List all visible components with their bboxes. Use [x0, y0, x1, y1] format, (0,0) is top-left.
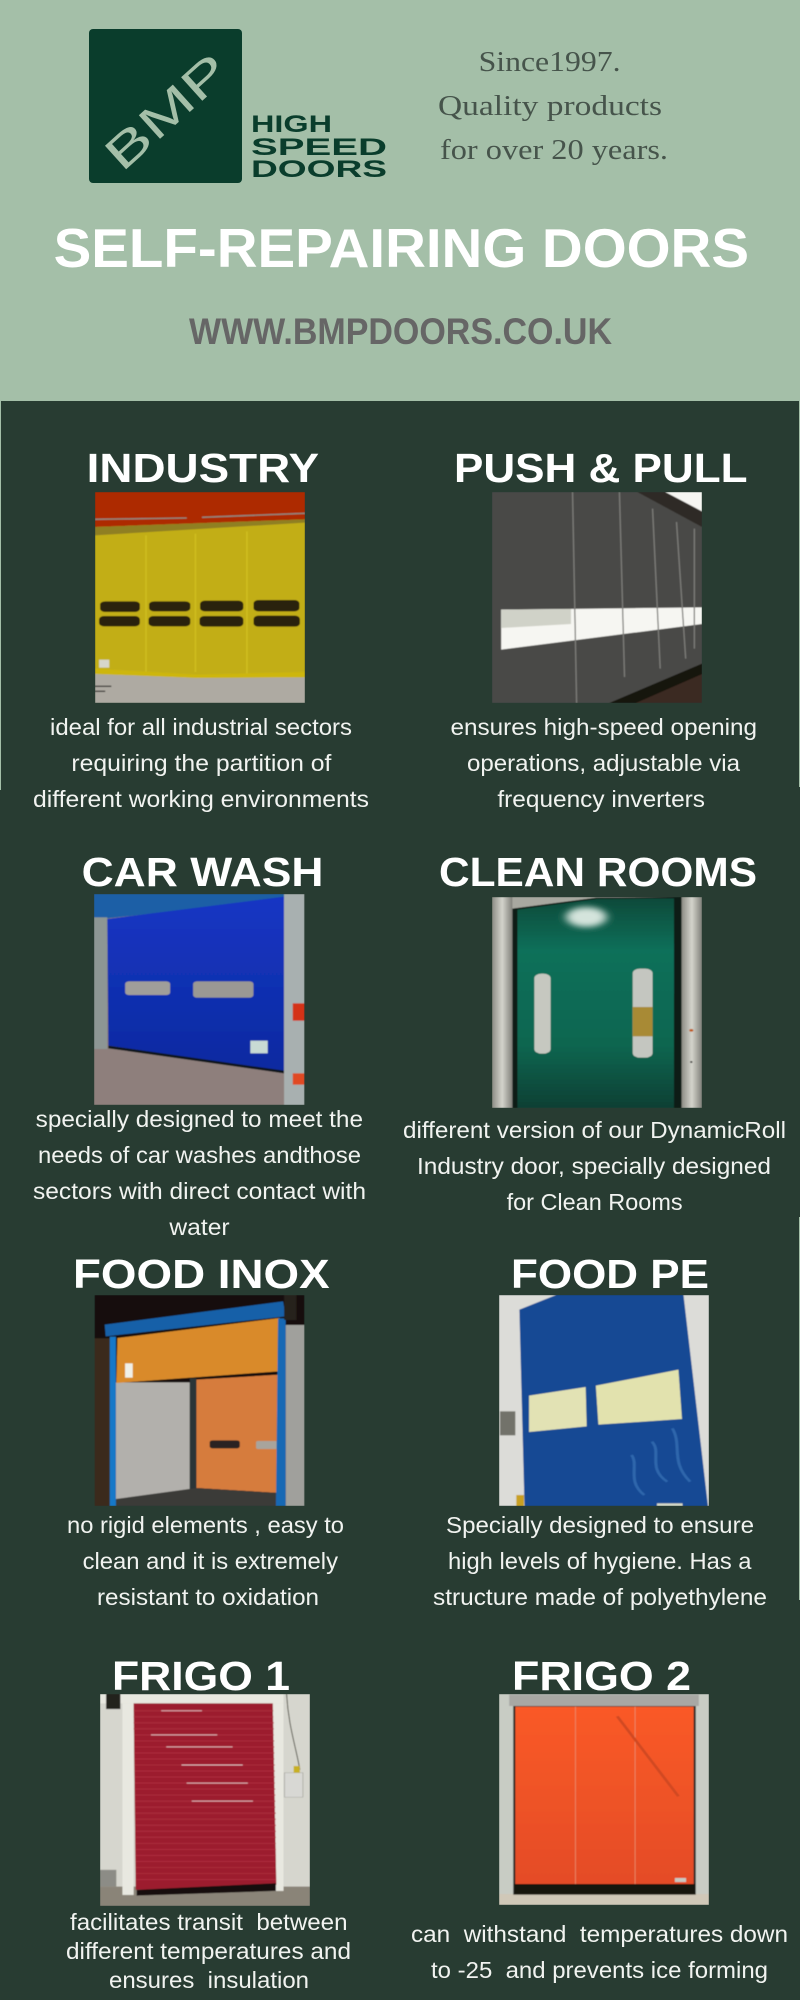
- website url: WWW.BMPDOORS.CO.UK: [189, 311, 612, 352]
- header band: [0, 0, 800, 401]
- panel: frigo 2: [411, 1653, 788, 1983]
- text: frigo 2: [411, 1921, 788, 1983]
- text: push and pull: frequency inverters: [497, 786, 705, 812]
- logo wordmark: DOORS: [251, 156, 387, 183]
- panel: food inox: [67, 1251, 344, 1610]
- panel: push and pull: [450, 445, 757, 812]
- text: frigo 1: facilitates transit between: [70, 1909, 347, 1935]
- photo: orange frigo door: [499, 1694, 709, 1905]
- photo: orange food inox door: [94, 1295, 304, 1506]
- logo wordmark: [251, 111, 387, 183]
- text: car wash: water: [168, 1214, 230, 1240]
- tagline: Since1997.: [479, 46, 621, 78]
- text: clean rooms: different version of our DynamicRoll: [403, 1117, 786, 1143]
- text: food pe: [433, 1512, 767, 1610]
- logo square: [89, 29, 242, 183]
- tagline: for over 20 years.: [440, 134, 668, 166]
- text: frigo 2: can withstand temperatures down: [411, 1921, 788, 1947]
- text: frigo 1: [66, 1909, 351, 1993]
- logo square: BMP: [94, 43, 239, 180]
- panel: food pe: [433, 1251, 767, 1610]
- photo: grey push and pull door: [492, 492, 702, 703]
- text: industry: different working environments: [33, 786, 369, 812]
- panel: frigo 1: [66, 1653, 351, 1993]
- text: food inox: resistant to oxidation: [97, 1584, 319, 1610]
- text: frigo 1: ensures insulation: [109, 1967, 309, 1993]
- text: food pe: Specially designed to ensure: [446, 1512, 754, 1538]
- text: car wash: [33, 1106, 366, 1240]
- heading: push and pull: PUSH & PULL: [454, 445, 748, 491]
- panel: industry: [33, 445, 369, 812]
- panel: car wash: [33, 849, 366, 1240]
- text: car wash: specially designed to meet the: [36, 1106, 363, 1132]
- logo: [89, 29, 387, 183]
- heading: food inox: FOOD INOX: [73, 1251, 330, 1297]
- heading: clean rooms: CLEAN ROOMS: [439, 849, 757, 895]
- text: industry: [33, 714, 369, 812]
- heading: frigo 1: FRIGO 1: [112, 1653, 290, 1699]
- tagline: [438, 46, 668, 166]
- text: car wash: needs of car washes andthose: [38, 1142, 361, 1168]
- logo wordmark: HIGH: [251, 111, 332, 138]
- text: clean rooms: for Clean Rooms: [507, 1189, 683, 1215]
- heading: food pe: FOOD PE: [511, 1251, 709, 1297]
- panel: clean rooms: [403, 849, 786, 1215]
- text: food pe: high levels of hygiene. Has a: [448, 1548, 752, 1574]
- text: industry: requiring the partition of: [71, 750, 332, 776]
- text: push and pull: ensures high-speed opening: [450, 714, 757, 740]
- photo: blue food pe door: [499, 1295, 709, 1506]
- text: push and pull: [450, 714, 757, 812]
- text: food inox: clean and it is extremely: [83, 1548, 338, 1574]
- photo: red frigo door: [100, 1694, 310, 1906]
- text: clean rooms: Industry door, specially designed: [417, 1153, 771, 1179]
- text: industry: ideal for all industrial sectors: [50, 714, 352, 740]
- heading: frigo 2: FRIGO 2: [512, 1653, 691, 1699]
- photo: blue car wash door: [94, 894, 304, 1105]
- text: frigo 1: different temperatures and: [66, 1938, 351, 1964]
- text: clean rooms: [403, 1117, 786, 1215]
- photo: green clean room door: [492, 897, 702, 1108]
- text: food pe: structure made of polyethylene: [433, 1584, 767, 1610]
- title: SELF-REPAIRING DOORS: [54, 217, 749, 279]
- text: frigo 2: to -25 and prevents ice forming: [431, 1957, 768, 1983]
- text: food inox: [67, 1512, 344, 1610]
- text: car wash: sectors with direct contact with: [33, 1178, 366, 1204]
- heading: car wash: CAR WASH: [82, 849, 323, 895]
- logo wordmark: SPEED: [251, 134, 387, 161]
- heading: industry: INDUSTRY: [87, 445, 319, 491]
- dark body panel: [0, 401, 800, 2000]
- tagline: Quality products: [438, 90, 662, 122]
- text: food inox: no rigid elements , easy to: [67, 1512, 344, 1538]
- text: push and pull: operations, adjustable via: [467, 750, 741, 776]
- photo: yellow industry door: [95, 492, 305, 703]
